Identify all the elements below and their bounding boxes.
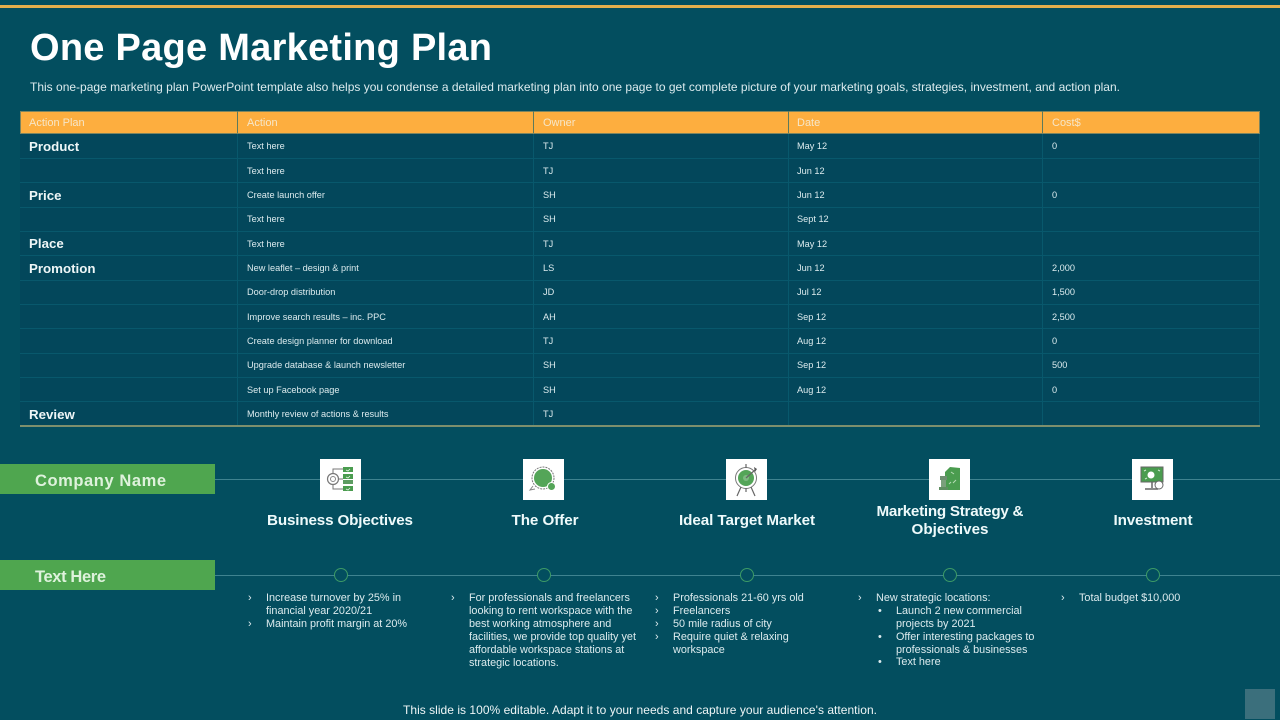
action column: Improve search results – inc. PPC: [247, 312, 386, 322]
intro text: This one-page marketing plan PowerPoint template also helps you condense a detailed marketing plan into one page to get complete picture of your marketing goals, strategies, investment, and action plan.: [30, 80, 1120, 94]
cost column: 0: [1052, 190, 1057, 200]
text block: ideal target market: ›: [655, 592, 659, 604]
text block: marketing strategy: Launch 2 new commercial: [896, 605, 1022, 617]
action column: Door-drop distribution: [247, 287, 335, 297]
row labels: [29, 139, 95, 422]
text block: marketing strategy: professionals & businesses: [896, 644, 1028, 656]
title: One Page Marketing Plan: [30, 27, 492, 69]
cost column: 2,500: [1052, 312, 1075, 322]
date column: Aug 12: [797, 336, 826, 346]
text block: business objectives: Maintain profit margin at 20%: [266, 618, 407, 630]
heading: marketing strategy and objectives: Marketing Strategy &: [876, 503, 1024, 520]
icon: business objectives: [320, 459, 361, 500]
owner column: TJ: [543, 239, 553, 249]
text block: business objectives: financial year 2020/21: [266, 605, 372, 617]
text block: marketing strategy: projects by 2021: [896, 618, 976, 630]
cost column: 0: [1052, 141, 1057, 151]
text block: ideal target market: [655, 592, 804, 656]
text block: marketing strategy: [858, 592, 1034, 668]
text block: ideal target market: workspace: [672, 644, 725, 656]
table header: Owner: [543, 117, 576, 129]
action column: New leaflet – design & print: [247, 263, 359, 273]
table header: Cost$: [1052, 117, 1081, 129]
text block: the offer: best working atmosphere and: [469, 618, 611, 630]
text block: investment: ›: [1061, 592, 1065, 604]
date column: Sept 12: [797, 214, 829, 224]
text block: the offer: facilities, we provide top quality yet: [469, 631, 636, 643]
action column: Text here: [247, 239, 285, 249]
banner: company name: [0, 464, 215, 494]
text block: marketing strategy: New strategic locations:: [876, 592, 991, 604]
date column: Jun 12: [797, 263, 825, 273]
text block: the offer: ›: [451, 592, 455, 604]
date column: Jun 12: [797, 190, 825, 200]
banner: text here: [0, 560, 215, 590]
cost column: 2,000: [1052, 263, 1075, 273]
text block: the offer: looking to rent workspace with the: [469, 605, 632, 617]
heading: marketing strategy and objectives: [876, 503, 1024, 538]
owner column: SH: [543, 214, 556, 224]
owner column: [543, 141, 556, 419]
action column: Monthly review of actions & results: [247, 409, 389, 419]
row labels: Promotion: [29, 261, 95, 276]
text block: business objectives: ›: [248, 592, 252, 604]
date column: May 12: [797, 141, 827, 151]
date column: May 12: [797, 239, 827, 249]
cost column: [1052, 141, 1075, 395]
table header: Action Plan: [29, 117, 85, 129]
heading: marketing strategy and objectives: Objectives: [912, 521, 988, 538]
text block: the offer: [451, 592, 636, 669]
text block: ideal target market: ›: [655, 605, 659, 617]
owner column: SH: [543, 360, 556, 370]
cost column: 0: [1052, 336, 1057, 346]
owner column: JD: [543, 287, 555, 297]
row labels: Product: [29, 139, 80, 154]
action column: Text here: [247, 141, 285, 151]
text block: marketing strategy: •: [878, 656, 882, 668]
owner column: LS: [543, 263, 554, 273]
owner column: TJ: [543, 141, 553, 151]
date column: [797, 141, 829, 395]
icon: investment: [1132, 459, 1173, 500]
action column: Text here: [247, 166, 285, 176]
action column: Create design planner for download: [247, 336, 393, 346]
row labels: Price: [29, 188, 62, 203]
action plan table: [20, 111, 1260, 427]
text block: investment: Total budget $10,000: [1079, 592, 1180, 604]
text block: business objectives: [248, 592, 407, 630]
text block: marketing strategy: •: [878, 631, 882, 643]
owner column: AH: [543, 312, 556, 322]
text block: the offer: For professionals and freelancers: [469, 592, 631, 604]
table header: Date: [797, 117, 820, 129]
action column: Create launch offer: [247, 190, 325, 200]
text block: marketing strategy: •: [878, 605, 882, 617]
footer note: This slide is 100% editable. Adapt it to your needs and capture your audience's attention.: [403, 703, 877, 717]
heading: business objectives: Business Objectives: [267, 512, 413, 529]
date column: Sep 12: [797, 312, 826, 322]
text block: ideal target market: ›: [655, 631, 659, 643]
text block: ideal target market: ›: [655, 618, 659, 630]
action column: Text here: [247, 214, 285, 224]
cost column: 1,500: [1052, 287, 1075, 297]
action column: Set up Facebook page: [247, 385, 339, 395]
icon: marketing strategy: [929, 459, 970, 500]
owner column: SH: [543, 190, 556, 200]
owner column: TJ: [543, 166, 553, 176]
text block: the offer: affordable workspace stations at: [469, 644, 624, 656]
table header: Action: [247, 117, 278, 129]
timeline markers: [334, 568, 1160, 582]
row labels: Place: [29, 236, 64, 251]
corner square: [1245, 689, 1275, 719]
text block: ideal target market: 50 mile radius of city: [673, 618, 772, 630]
text block: business objectives: ›: [248, 618, 252, 630]
text block: ideal target market: Require quiet & relaxing: [673, 631, 789, 643]
text block: the offer: strategic locations.: [469, 657, 559, 669]
table header: [20, 111, 1260, 134]
row labels: Review: [29, 407, 75, 422]
owner column: TJ: [543, 336, 553, 346]
text block: marketing strategy: Text here: [896, 656, 941, 668]
cost column: 0: [1052, 385, 1057, 395]
date column: Jun 12: [797, 166, 825, 176]
text block: marketing strategy: Offer interesting packages to: [896, 631, 1034, 643]
text block: business objectives: Increase turnover by 25% in: [266, 592, 401, 604]
text block: ideal target market: Professionals 21-60 yrs old: [673, 592, 804, 604]
date column: Aug 12: [797, 385, 826, 395]
heading: investment: Investment: [1114, 512, 1192, 529]
banner: text here: Text Here: [35, 568, 106, 586]
date column: Sep 12: [797, 360, 826, 370]
icon: ideal target market: [726, 459, 767, 500]
owner column: SH: [543, 385, 556, 395]
banner: company name: Company Name: [35, 472, 166, 490]
date column: Jul 12: [797, 287, 822, 297]
action column: [247, 141, 405, 419]
owner column: TJ: [543, 409, 553, 419]
heading: the offer: The Offer: [512, 512, 579, 529]
cost column: 500: [1052, 360, 1067, 370]
icon: the offer: [523, 459, 564, 500]
action column: Upgrade database & launch newsletter: [247, 360, 405, 370]
heading: ideal target market: Ideal Target Market: [679, 512, 815, 529]
text block: ideal target market: Freelancers: [673, 605, 731, 617]
text block: marketing strategy: ›: [858, 592, 862, 604]
